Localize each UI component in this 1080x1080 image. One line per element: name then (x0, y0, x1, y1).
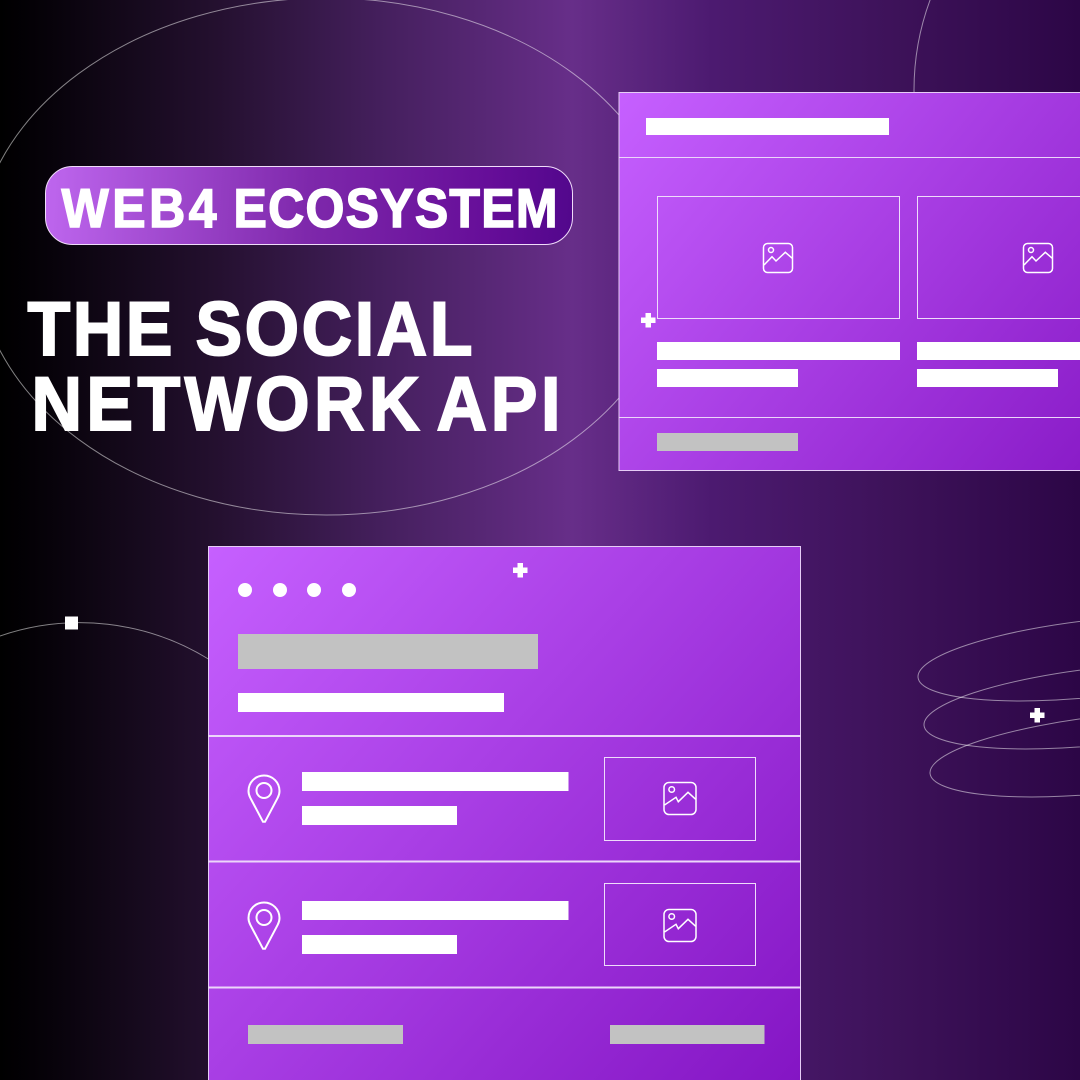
image placeholder (604, 758, 756, 840)
decorative large ellipse outline (0, 0, 676, 515)
icon: square marker (65, 616, 78, 630)
icon: plus marker right (1030, 708, 1044, 722)
badge: web4 ecosystem: ECOSYSTEM (234, 179, 558, 240)
title (28, 287, 560, 447)
icon: location pin (248, 902, 280, 949)
icon: plus marker on bottom card (513, 563, 528, 578)
image placeholder 2 (918, 196, 1080, 318)
title: API (436, 362, 561, 447)
image placeholder (604, 884, 756, 966)
text bars (302, 772, 568, 825)
four dots (238, 583, 356, 597)
row 1 (248, 758, 756, 840)
text bars (302, 901, 568, 954)
icon: location pin (248, 776, 280, 822)
row 2 (248, 884, 756, 966)
decorative arc left (0, 623, 210, 660)
decorative stacked ellipses right (914, 600, 1080, 812)
heading placeholder (238, 634, 538, 669)
title: NETWORK (32, 362, 420, 447)
decorative circle top right (914, 0, 1080, 350)
subheading bar (238, 693, 504, 712)
footer buttons (248, 1025, 764, 1044)
header bar (646, 118, 889, 135)
panel: bottom card (208, 546, 801, 1080)
icon: plus marker on top card (641, 313, 656, 328)
badge: web4 ecosystem (46, 166, 572, 244)
footer button (657, 433, 798, 451)
image placeholder 1 (658, 196, 900, 318)
badge: web4 ecosystem: WEB4 (62, 179, 216, 240)
title: SOCIAL (196, 287, 472, 372)
text bars column 1 (657, 342, 900, 387)
title: THE (28, 287, 172, 372)
panel: top right card (619, 92, 1080, 470)
text bars column 2 (917, 342, 1080, 387)
